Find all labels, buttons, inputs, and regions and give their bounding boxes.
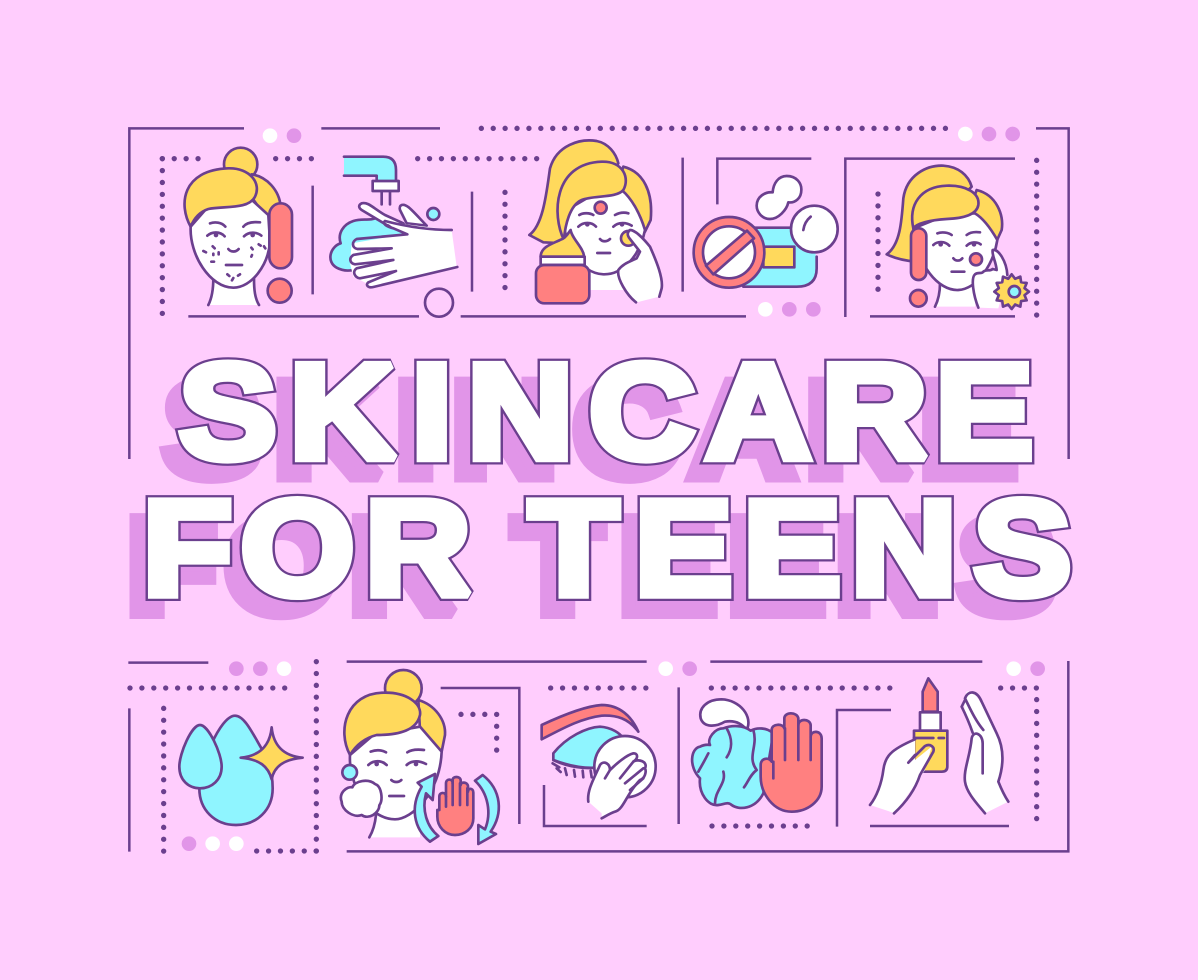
title: SKINCARE: [179, 335, 1033, 487]
title: FOR TEENS: [143, 472, 1071, 623]
icon: eye with cotton pad: [542, 705, 656, 818]
title: SKINCARE: [163, 353, 1017, 505]
bottom decorative frame: [128, 661, 1068, 852]
icon: prohibited soap and bubbles: [694, 176, 838, 288]
title: FOR TEENS: [143, 472, 1071, 623]
icon: girl with foam, stop hand and arrows: [341, 670, 499, 844]
icon: washing sponge and stop hand: [692, 699, 822, 812]
icon: water drops with sparkle: [179, 716, 303, 825]
title: SKINCARE: [179, 335, 1033, 487]
icon: washing hands under faucet: [330, 157, 457, 288]
icon: girl applying cream from jar: [529, 140, 662, 303]
icon: girl with acne and exclamation mark: [185, 148, 292, 305]
icon: girl touching pimple: [887, 166, 1029, 309]
title: FOR TEENS: [127, 490, 1055, 641]
icon: lipstick and refusing hands: [870, 678, 1008, 813]
top decorative frame: [129, 127, 1069, 459]
title: [127, 335, 1071, 641]
